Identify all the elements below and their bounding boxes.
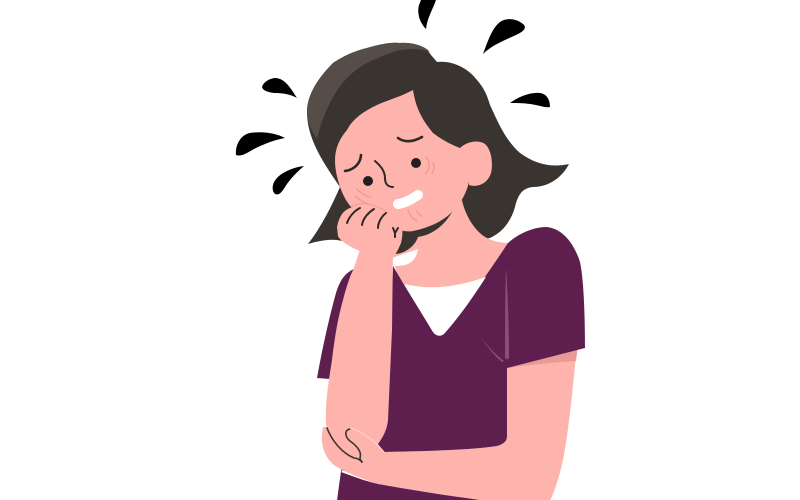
sleeve folds [505,268,509,359]
wrinkles [355,157,434,221]
face [335,90,470,232]
hair highlight [307,43,430,139]
elbow and hand lines [327,428,362,462]
teeth [398,195,418,204]
eyebrows [345,155,361,171]
shirt lower hem [337,472,487,500]
finger creases [352,204,387,212]
hand highlight [350,428,384,452]
eyes [363,176,373,186]
sleeve shadow [505,345,578,368]
jaw shadow [394,212,452,254]
left sleeve [317,269,360,379]
hair [307,43,569,250]
fist [337,204,402,257]
nose [375,161,393,187]
upper arm [326,250,393,452]
lower arm [322,345,578,500]
stress drops [236,0,550,194]
white undershirt [405,277,486,336]
neck and chest [392,200,509,292]
forearm hand over elbow [322,427,400,484]
undershirt collar near wrist [392,249,418,266]
ear [460,141,492,186]
shirt body and right sleeve [337,227,585,500]
facial features [345,137,434,221]
